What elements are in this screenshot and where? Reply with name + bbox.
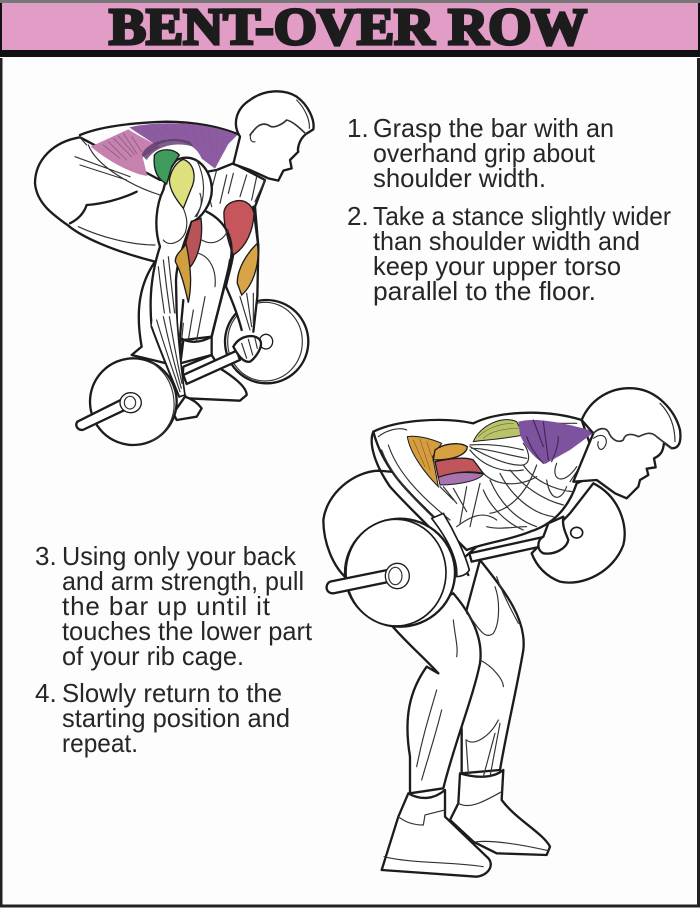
text block: steps 1 and 2: Take a stance slightly wider xyxy=(373,201,671,231)
title: BENT-OVER ROW xyxy=(109,0,587,56)
near leg xyxy=(390,577,518,793)
bar between plates xyxy=(183,351,240,384)
near arm yellow rear deltoid xyxy=(169,159,194,208)
text block: steps 1 and 2: than shoulder width and xyxy=(373,226,640,256)
text block: steps 3 and 4: 3. xyxy=(35,541,57,571)
text block: steps 1 and 2: 1. xyxy=(347,113,369,143)
header band xyxy=(0,0,700,57)
near foot and sock xyxy=(382,790,491,877)
back and arm muscles: gold, red, lilac xyxy=(407,436,483,487)
text block: steps 3 and 4: the bar up until it xyxy=(62,591,271,621)
torso xyxy=(373,413,600,550)
far weight plate xyxy=(225,300,308,383)
bar between plates xyxy=(469,537,543,562)
far hand xyxy=(233,336,261,362)
head xyxy=(233,91,314,181)
back muscles: trapezius purple, lats pink xyxy=(91,123,237,176)
figure: start position, standing bent with bar at shins xyxy=(35,91,314,445)
text block: steps 1 and 2: 2. xyxy=(347,201,369,231)
upper back: yellow-green deltoid xyxy=(473,420,523,442)
near weight plate with sleeve xyxy=(327,519,455,627)
text block: steps 3 and 4 xyxy=(35,541,313,758)
near arm upper outline xyxy=(372,429,468,575)
far foot and sock xyxy=(450,720,550,855)
near weight plate with sleeve xyxy=(76,358,177,445)
rear deltoid: green xyxy=(154,150,179,184)
text block: steps 3 and 4: repeat. xyxy=(62,728,138,758)
hips behind plate xyxy=(323,471,477,623)
text block: steps 3 and 4: Slowly return to the xyxy=(62,678,282,708)
upper back: purple trapezius xyxy=(518,420,595,464)
far leg xyxy=(457,560,524,773)
far weight plate xyxy=(532,483,625,583)
text block: steps 3 and 4: of your rib cage. xyxy=(62,641,244,671)
text block: steps 3 and 4: starting position and xyxy=(62,703,290,733)
text block: steps 1 and 2: Grasp the bar with an xyxy=(373,113,614,143)
near arm xyxy=(151,158,212,397)
torso detail lines xyxy=(202,167,265,208)
text block: steps 1 and 2: overhand grip about xyxy=(373,138,596,168)
figure: row position, torso parallel with bar at ribs xyxy=(323,388,680,877)
body outline xyxy=(35,122,265,367)
text block: steps 3 and 4: Using only your back xyxy=(62,541,297,571)
far arm xyxy=(226,207,258,332)
near forearm over plate xyxy=(432,513,469,577)
text block: steps 3 and 4: and arm strength, pull xyxy=(62,566,304,596)
text block: steps 1 and 2: shoulder width. xyxy=(373,163,546,193)
text block: steps 1 and 2 xyxy=(347,113,671,306)
text block: steps 3 and 4: touches the lower part xyxy=(62,616,313,646)
head xyxy=(573,388,680,498)
chest and shoulder striations xyxy=(470,423,593,484)
text block: steps 1 and 2: keep your upper torso xyxy=(373,251,621,281)
far hand and forearm xyxy=(538,517,583,554)
arm muscles: red triceps and gold brachioradialis xyxy=(175,201,258,303)
near forearm over plate xyxy=(152,313,185,397)
near shoe xyxy=(173,397,202,420)
text block: steps 1 and 2: parallel to the floor. xyxy=(373,276,596,306)
thighs and far knee xyxy=(180,212,232,363)
far shoe xyxy=(182,355,247,401)
text block: steps 3 and 4: 4. xyxy=(35,678,57,708)
